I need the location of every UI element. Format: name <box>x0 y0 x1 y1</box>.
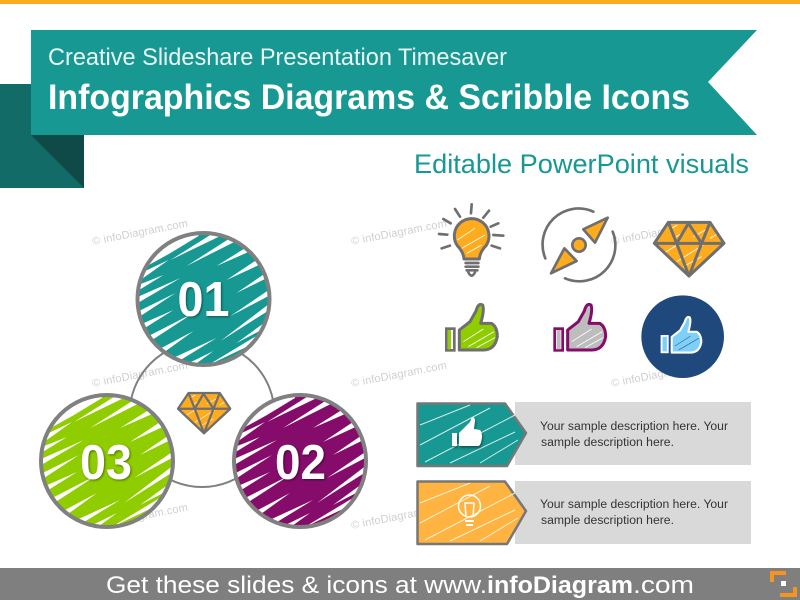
circle 01: 01 <box>178 273 230 327</box>
connecting ring <box>130 342 274 487</box>
watermarks: © infoDiagram.com <box>350 360 448 390</box>
logo <box>770 571 797 597</box>
watermarks: © infoDiagram.com <box>91 502 189 532</box>
icon grid <box>439 204 724 378</box>
footer bar <box>0 568 800 600</box>
row 1: description box <box>418 402 751 466</box>
watermarks: © infoDiagram.com <box>350 502 448 532</box>
footer text: infoDiagram <box>487 572 633 599</box>
title banner <box>31 30 757 135</box>
circle 03 <box>39 393 175 529</box>
row 2: description box: sample description here. <box>541 515 674 527</box>
ribbon fold <box>0 84 84 188</box>
circle 03: 03 <box>80 436 132 490</box>
icon: light bulb <box>439 204 503 276</box>
row 1: description box: sample description here. <box>541 437 674 449</box>
top accent bar <box>0 0 800 4</box>
description text: Your sample description here. Your <box>540 421 728 433</box>
circle 02: 02 <box>275 436 326 490</box>
tag: thumb <box>418 404 526 466</box>
watermarks <box>91 218 708 532</box>
title: Infographics Diagrams & Scribble Icons <box>48 78 690 117</box>
icon: green thumb <box>446 304 497 350</box>
subheading: Editable PowerPoint visuals <box>414 149 749 179</box>
icon: blue badge thumb <box>641 295 724 378</box>
icon: compass <box>543 208 615 281</box>
watermarks: © infoDiagram.com <box>91 218 189 248</box>
description text: Your sample description here. Your <box>540 499 728 511</box>
icon: purple thumb <box>555 304 606 350</box>
watermarks: © infoDiagram.com <box>610 360 708 390</box>
circle 02 <box>232 393 368 529</box>
tag: bulb <box>418 482 526 544</box>
subtitle: Creative Slideshare Presentation Timesaver <box>48 44 507 71</box>
watermarks: © infoDiagram.com <box>350 218 448 248</box>
watermarks: © infoDiagram.com <box>91 360 189 390</box>
row 2: description box <box>418 481 751 544</box>
footer text: .com <box>633 572 694 599</box>
icon: diamond <box>654 222 724 276</box>
center diamond icon <box>178 393 230 433</box>
watermarks: © infoDiagram.com <box>610 218 708 248</box>
footer text: Get these slides & icons at www. <box>106 572 487 599</box>
circle 01 <box>136 231 272 367</box>
footer text <box>106 572 694 599</box>
